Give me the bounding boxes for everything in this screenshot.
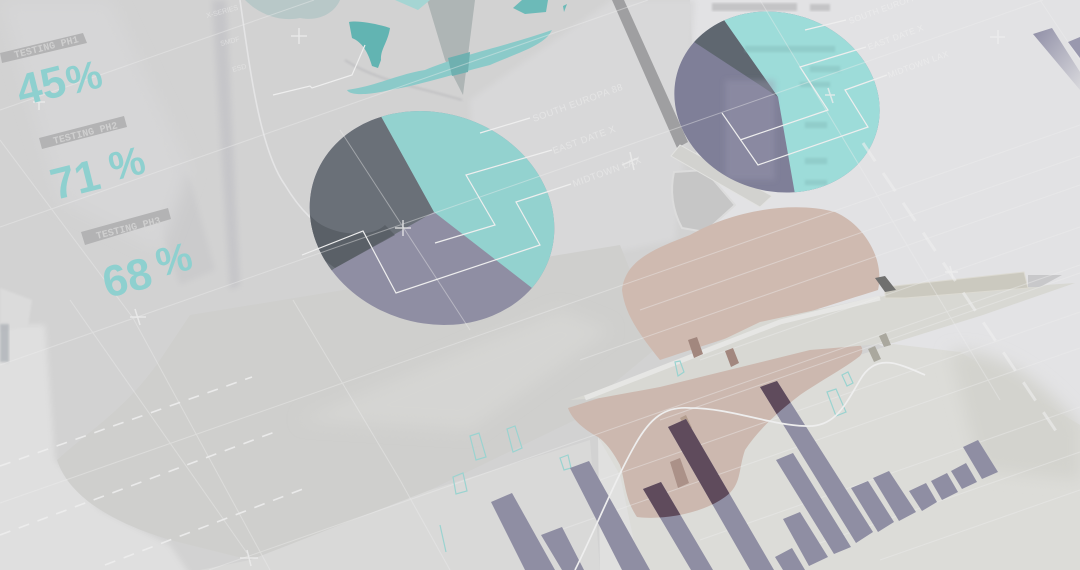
label: Midtown small: MIDTOWN LAX [886,49,950,80]
testing stat: phase one [0,33,107,116]
trend curve [575,363,925,570]
map: strip over dark collar [448,52,470,76]
window dark strip [0,324,9,362]
value: 45 [12,56,71,116]
value: 68 [98,248,157,308]
bar 10 [851,481,894,532]
callout lines pie one [273,45,571,293]
bar sections over the hand [643,381,873,570]
coat collar dark V [427,0,475,95]
pen [671,145,772,207]
candlestick markers [440,361,853,552]
clipboard edge highlight [585,298,880,398]
callout lines pie two [722,20,887,165]
tag [39,116,127,149]
percent sign: % [62,52,107,104]
backdrop: bright room on the right [690,0,1080,346]
window blinds at the far left [2,291,30,320]
stethoscope chest piece [672,170,735,232]
map: teal wedge at top [395,0,430,10]
pale column in purple slice [725,80,775,180]
map: long teal strip [347,30,552,94]
bar 6 [760,381,873,543]
backdrop: bright strip under clipboard tip [880,290,1080,430]
callout labels: pie one [531,82,643,190]
backdrop: shaded page corner [950,351,1080,480]
label: East Date small: EAST DATE X [866,22,925,52]
callout labels: pie two [847,0,950,80]
pie chart: upper right [674,12,880,192]
clipboard second clip tab [1028,275,1062,287]
testing stat: phase two [39,116,150,210]
coat bright folds [128,110,181,226]
map: Australia [513,0,548,14]
coat lower panel [200,440,600,570]
dashed trend lines [0,377,308,565]
bar 9 [775,548,805,570]
pen tip [875,276,896,292]
slice: teal [382,111,554,288]
tag text: TESTING PH3 [95,216,162,243]
bar 15 [963,440,998,479]
map: South America [349,21,390,68]
top right partial bars [1033,28,1080,90]
label: East Date: EAST DATE X [551,124,618,157]
slice: dark grey [310,116,434,270]
bar 14 [951,463,977,489]
hand fingers below the clipboard [568,337,862,518]
label: South Europa: SOUTH EUROPA 88 [531,82,625,125]
white coat placket strip [598,438,600,548]
sleeve highlight [300,310,610,430]
bar chart [491,381,998,570]
stethoscope thin tube [240,0,310,218]
label: small low: ESD [232,63,247,74]
value: 71 [46,150,105,210]
tag text: TESTING PH1 [13,35,80,62]
clipboard metal clip [885,272,1028,298]
bar 12 [909,483,937,511]
backdrop: bright window at lower left [0,325,200,570]
map of the world [245,0,567,94]
bar 3 [570,461,650,570]
map: island dot [563,4,567,12]
percent sign: % [152,234,197,286]
thick dashed diagonal [863,143,1060,437]
coat soft fold wedge [125,100,215,285]
stethoscope tube [612,0,688,148]
blurred document rows behind the top right pie [712,3,830,11]
slice: teal [724,12,880,192]
bar 7 [776,453,851,554]
percent sign: % [105,138,150,190]
slice: dark grey [694,20,778,96]
testing stat: phase three [81,208,197,308]
coat left fold shadows [214,2,238,286]
dark bar 5 section [668,419,774,570]
hand holding the pen [622,207,879,360]
bar 1 [491,493,555,570]
label: small mid: SMDF [220,36,241,48]
dark bar 6 section [760,381,873,543]
partial bar right [1068,37,1080,58]
slice: purple [674,12,880,192]
map: North America faint [245,0,340,19]
faint side labels [206,5,247,74]
dark bar 4 section [643,482,713,570]
bar 5 [668,419,774,570]
bar 2 [541,527,584,570]
tag text: TESTING PH2 [52,121,119,148]
tag [0,33,87,63]
bar 11 [873,471,916,521]
sleeve of the coat [58,245,622,532]
pie chart: large centre [310,111,554,325]
label: small top: X-SERIES [206,5,239,20]
tag [81,208,171,245]
slice: stethoscope shadow [310,215,395,268]
clipboard [570,283,1075,400]
blurred rows seen through the pie [745,46,840,185]
label: Midtown: MIDTOWN LAX [571,155,643,190]
bar 4 [643,482,713,570]
bar 8 [783,512,828,566]
coat right side [690,2,692,24]
slice: purple [310,111,554,325]
backdrop: lower right page [600,344,1080,570]
bar 13 [931,473,958,500]
lapel crease [345,60,462,100]
candlestick markers on hand [660,333,891,522]
partial bar left [1033,28,1080,90]
